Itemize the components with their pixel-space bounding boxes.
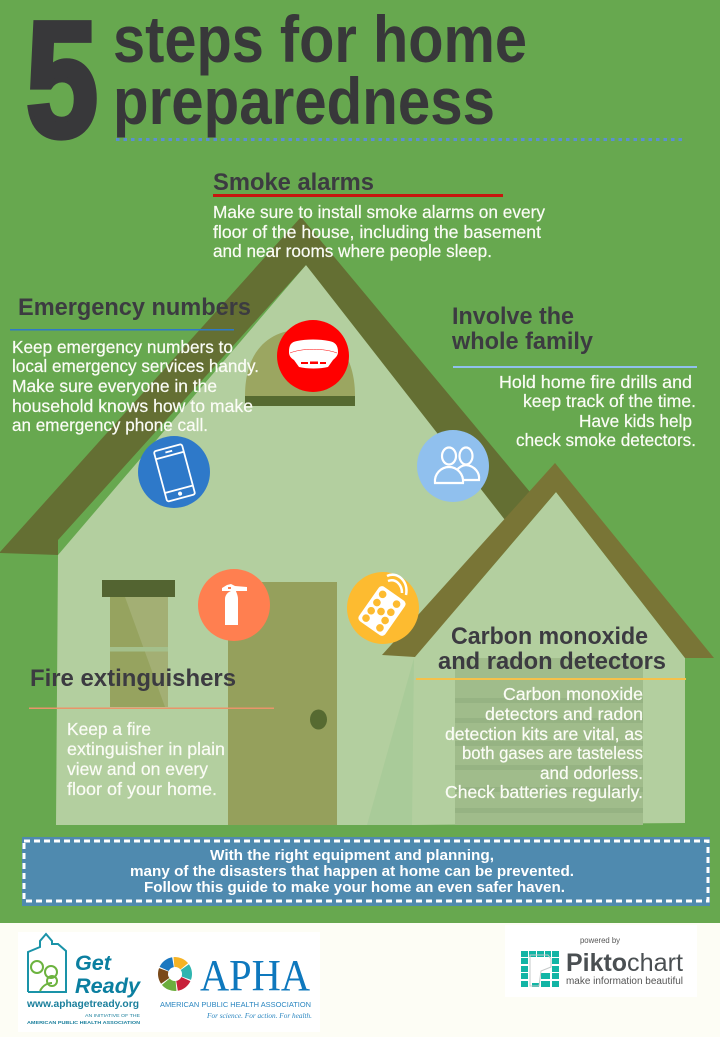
panel: fire extinguishers: Fire extinguishers bbox=[30, 665, 236, 692]
logo: Piktochart bbox=[521, 936, 683, 987]
panel: carbon monoxide and radon detectors: Carbon monoxide bbox=[451, 623, 648, 650]
title bbox=[26, 0, 527, 171]
title: steps for home bbox=[113, 2, 527, 76]
garage door bbox=[455, 658, 643, 825]
panel: smoke alarms: floor of the house, including the basement bbox=[213, 222, 541, 242]
panel: emergency numbers: household knows how to make bbox=[12, 396, 253, 416]
panel: carbon monoxide and radon detectors: both gases are tasteless bbox=[462, 743, 643, 763]
panel: involve the whole family: keep track of the time. bbox=[523, 391, 696, 411]
panel: involve the whole family: Involve the bbox=[452, 303, 574, 330]
panel: fire extinguishers: floor of your home. bbox=[67, 779, 217, 799]
footer band bbox=[0, 923, 720, 1037]
logo: APHA: For science. For action. For health. bbox=[206, 1012, 312, 1020]
icon: family bbox=[417, 430, 489, 502]
logo: APHA: AMERICAN PUBLIC HEALTH ASSOCIATION bbox=[160, 1002, 311, 1009]
logo: Piktochart: make information beautiful bbox=[566, 976, 683, 987]
logo: Get Ready: Get bbox=[75, 952, 112, 975]
panel: smoke alarms: Make sure to install smoke alarms on every bbox=[213, 202, 545, 222]
main house wall bbox=[56, 265, 520, 825]
panel: fire extinguishers: view and on every bbox=[67, 759, 208, 779]
panel: carbon monoxide and radon detectors: detectors and radon bbox=[485, 704, 643, 724]
side window bbox=[102, 580, 175, 707]
icon: remote detector bbox=[347, 572, 419, 644]
callout banner: many of the disasters that happen at home can be prevented. bbox=[130, 863, 574, 880]
logo: Piktochart: powered by bbox=[580, 936, 620, 945]
logo: APHA bbox=[158, 951, 312, 1020]
icon: fire extinguisher bbox=[198, 569, 270, 641]
logo: Piktochart: Pikto bbox=[566, 949, 627, 977]
attic window bbox=[245, 330, 355, 406]
logo: Piktochart: chart bbox=[627, 949, 683, 977]
logo: Get Ready: www.aphagetready.org bbox=[26, 999, 139, 1010]
main roof bbox=[0, 217, 545, 555]
panel: smoke alarms bbox=[213, 169, 545, 261]
panel: emergency numbers: an emergency phone call. bbox=[12, 415, 208, 435]
logo: Get Ready: AN INITIATIVE OF THE bbox=[85, 1013, 140, 1018]
panel: involve the whole family: Hold home fire drills and bbox=[499, 372, 692, 392]
icon: Piktochart mark bbox=[521, 951, 559, 987]
panel: emergency numbers bbox=[10, 294, 259, 435]
title: preparedness bbox=[113, 64, 495, 138]
panel: involve the whole family bbox=[451, 303, 697, 450]
panel: smoke alarms: Smoke alarms bbox=[213, 169, 374, 196]
logo: APHA: APHA bbox=[200, 951, 310, 1000]
panel: fire extinguishers bbox=[29, 665, 274, 799]
logo: Get Ready: AMERICAN PUBLIC HEALTH ASSOCIATION bbox=[27, 1020, 141, 1026]
panel: fire extinguishers: extinguisher in plain bbox=[67, 739, 225, 759]
panel: carbon monoxide and radon detectors: and radon detectors bbox=[438, 648, 666, 675]
garage roof bbox=[382, 463, 714, 658]
panel: carbon monoxide and radon detectors: detection kits are vital, as bbox=[445, 724, 643, 744]
icon: smartphone bbox=[138, 436, 210, 508]
door bbox=[228, 582, 337, 825]
panel: emergency numbers: Emergency numbers bbox=[18, 294, 251, 321]
logo: Get Ready: Ready bbox=[75, 975, 141, 998]
panel: carbon monoxide and radon detectors bbox=[416, 623, 686, 802]
callout banner: With the right equipment and planning, bbox=[210, 847, 494, 864]
panel: emergency numbers: local emergency services handy. bbox=[12, 356, 259, 376]
panel: carbon monoxide and radon detectors: Carbon monoxide bbox=[503, 684, 643, 704]
logo: Get Ready bbox=[26, 934, 141, 1026]
panel: involve the whole family: check smoke detectors. bbox=[516, 430, 696, 450]
panel: carbon monoxide and radon detectors: Check batteries regularly. bbox=[445, 782, 643, 802]
garage house wall bbox=[415, 492, 685, 825]
panel: involve the whole family: Have kids help bbox=[579, 411, 692, 431]
panel: smoke alarms: and near rooms where people sleep. bbox=[213, 241, 492, 261]
panel: involve the whole family: whole family bbox=[451, 328, 594, 355]
house illustration bbox=[0, 217, 714, 825]
callout banner bbox=[22, 837, 710, 906]
callout banner: Follow this guide to make your home an even safer haven. bbox=[144, 879, 565, 896]
panel: emergency numbers: Keep emergency numbers to bbox=[12, 337, 233, 357]
panel: fire extinguishers: Keep a fire bbox=[67, 719, 151, 739]
icon: smoke alarm bbox=[277, 320, 349, 392]
wall shadow bbox=[367, 658, 414, 825]
panel: carbon monoxide and radon detectors: and odorless. bbox=[540, 763, 643, 783]
panel: emergency numbers: Make sure everyone in the bbox=[12, 376, 217, 396]
